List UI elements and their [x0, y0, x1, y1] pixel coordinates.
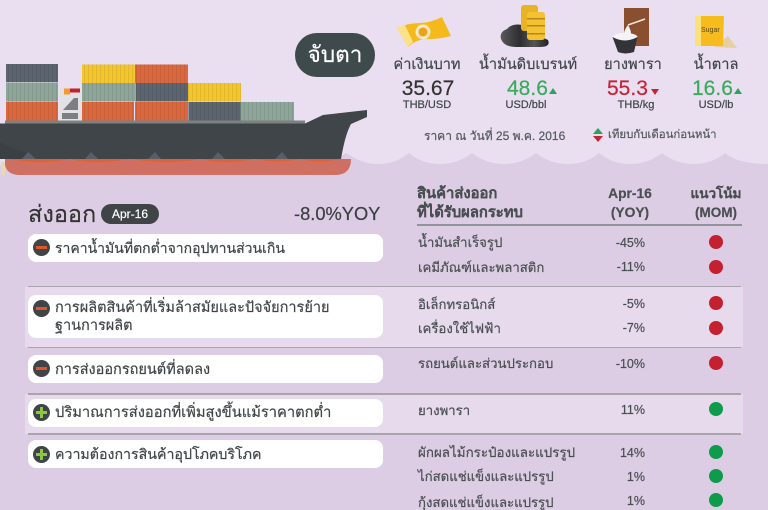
factor: cars — [28, 355, 383, 383]
factor text: ความต้องการสินค้าอุปโภคบริโภค — [55, 447, 262, 463]
illustration: container ship — [0, 64, 367, 175]
table header: products — [417, 185, 523, 221]
table header: mom: (MOM) — [695, 205, 737, 220]
factor text: ราคาน้ำมันที่ตกต่ำจากอุปทานส่วนเกิน — [55, 240, 285, 256]
badge text: จับตา — [308, 42, 362, 67]
deck — [5, 120, 305, 124]
dark hull — [0, 110, 367, 159]
price date note: ราคา ณ วันที่ 25 พ.ค. 2016 — [424, 129, 565, 143]
commodity: baht — [393, 57, 461, 111]
factor: production — [28, 295, 383, 338]
factor: demand — [28, 440, 383, 468]
factor: oil price — [28, 234, 383, 262]
red lower hull — [5, 159, 351, 175]
table header: yoy: (YOY) — [611, 205, 649, 220]
table header: products: สินค้าส่งออก — [417, 186, 497, 202]
commodity name: น้ำมันดิบเบรนท์ — [479, 57, 577, 73]
commodity: brent — [479, 53, 577, 111]
table header: yoy: Apr-16 — [608, 186, 652, 201]
icon: plus — [33, 446, 50, 463]
arrow down — [651, 89, 659, 95]
band: production — [25, 287, 743, 347]
table rows: รถยนต์และส่วนประกอบ — [418, 356, 553, 371]
table rows: ผักผลไม้กระป๋องและแปรรูป — [418, 445, 575, 460]
table rows: อิเล็กทรอนิกส์ — [418, 297, 495, 312]
table rows: กุ้งสดแช่แข็งและแปรรูป — [418, 495, 554, 510]
legend text: เทียบกับเดือนก่อนหน้า — [608, 129, 717, 141]
table rows: ไก่สดแช่แข็งและแปรรูป — [418, 469, 554, 484]
commodity name: น้ำตาล — [694, 57, 738, 73]
badge: month — [101, 204, 159, 224]
table rows: 1% — [627, 470, 645, 484]
commodity name: ค่าเงินบาท — [393, 57, 461, 73]
containers — [6, 64, 294, 120]
icon: minus — [33, 360, 50, 377]
badge: watch — [295, 33, 375, 77]
table rows: น้ำมันสำเร็จรูป — [418, 235, 502, 250]
icon: plus — [33, 404, 50, 421]
factor: volume — [28, 399, 383, 427]
propeller — [1, 162, 5, 175]
arrow up — [734, 88, 742, 94]
icon: minus — [33, 239, 50, 256]
factor text: การผลิตสินค้าที่เริ่มล้าสมัยและปัจจัยการย้าย — [55, 300, 329, 316]
commodity unit: THB/kg — [618, 99, 654, 111]
table header: mom: แนวโน้ม — [691, 186, 741, 201]
table rows: เครื่องใช้ไฟฟ้า — [418, 321, 501, 336]
commodity unit: USD/bbl — [506, 99, 546, 111]
table rows: -10% — [616, 357, 645, 371]
table rows: ยางพารา — [418, 403, 470, 418]
commodity unit: USD/lb — [699, 99, 733, 111]
table rows: -5% — [623, 297, 645, 311]
badge: month: Apr-16 — [112, 207, 148, 221]
table header: products: ที่ได้รับผลกระทบ — [417, 205, 523, 221]
table rows: 1% — [627, 494, 645, 508]
band: rubber — [25, 394, 743, 434]
commodity value: 35.67 — [402, 77, 454, 100]
commodity value: 48.6 — [507, 77, 548, 100]
arrow up — [549, 88, 557, 94]
legend arrows — [593, 128, 603, 142]
icon: rubber latex — [612, 8, 649, 54]
ship bridge — [60, 88, 81, 123]
table header: yoy — [608, 186, 652, 220]
table rows: 14% — [620, 446, 645, 460]
factor text: ฐานการผลิต — [55, 318, 133, 334]
commodity value: 16.6 — [692, 77, 733, 100]
commodity name: ยางพารา — [604, 57, 662, 73]
icon: sugar bag: Sugar — [701, 27, 720, 34]
factor text: การส่งออกรถยนต์ที่ลดลง — [55, 362, 210, 378]
commodity: rubber — [604, 57, 662, 111]
heading: exports: ส่งออก — [28, 201, 96, 227]
icon: sugar bag — [695, 16, 737, 48]
export growth: -8.0%YOY — [294, 203, 380, 224]
table rows: -45% — [616, 236, 645, 250]
icon: baht flag — [397, 17, 451, 47]
table header: mom — [691, 185, 741, 220]
table rows: เคมีภัณฑ์และพลาสติก — [418, 260, 544, 275]
icon: oil barrels — [500, 5, 549, 47]
table rows: -7% — [623, 321, 645, 335]
icon: minus — [33, 300, 50, 317]
commodity: sugar — [692, 53, 742, 111]
table rows: 11% — [621, 403, 645, 417]
table rows: -11% — [617, 260, 645, 274]
factor text — [55, 296, 329, 334]
commodity unit: THB/USD — [403, 99, 451, 111]
commodity value: 55.3 — [607, 77, 648, 100]
factor text: ปริมาณการส่งออกที่เพิ่มสูงขึ้นแม้ราคาตกต่ำ — [55, 405, 331, 421]
